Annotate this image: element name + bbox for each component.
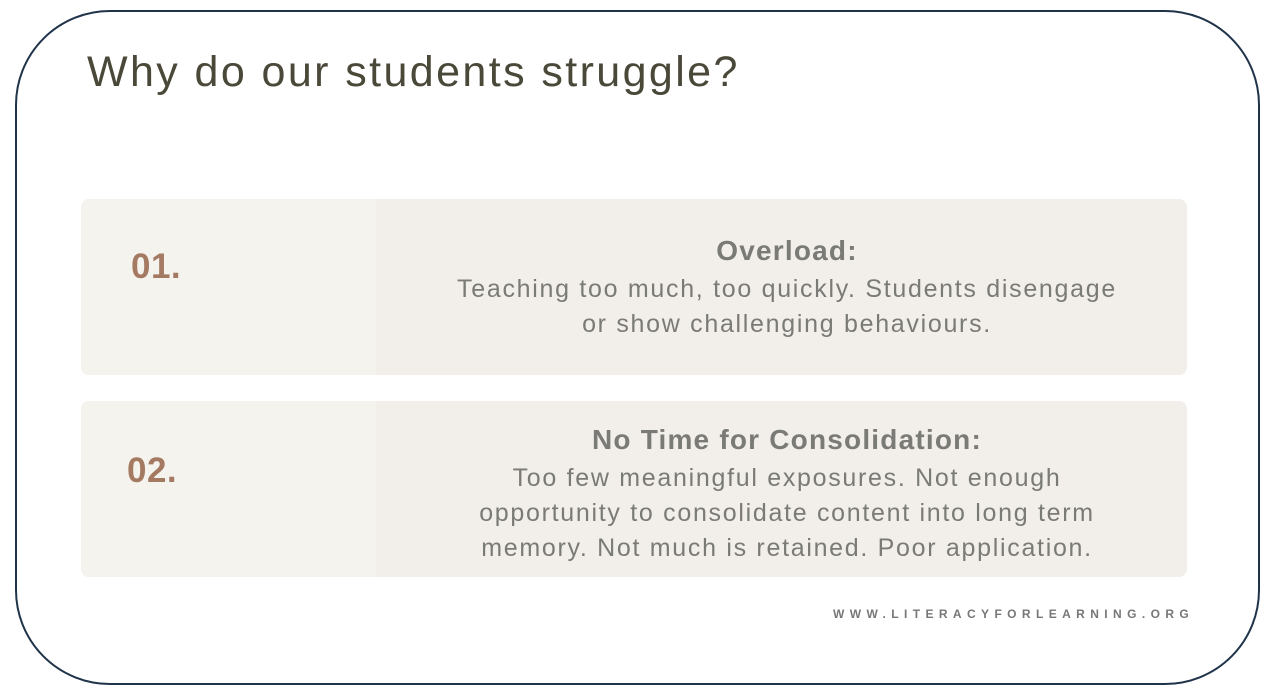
panel: overload [81,199,1187,375]
number 02: 02. [127,451,177,490]
text: consolidation: memory. Not much is retained. Poor application. [481,534,1093,562]
text: overload: Overload: [716,235,858,266]
text: consolidation: No Time for Consolidation: [592,424,982,455]
text: consolidation [479,424,1095,562]
text: overload: or show challenging behaviours. [582,310,992,338]
text: overload [457,235,1117,338]
text: overload: Teaching too much, too quickly. Students disengage [457,275,1117,303]
title: Why do our students struggle? [87,48,740,96]
text: consolidation: opportunity to consolidate content into long term [479,499,1095,527]
number 01: 01. [131,247,181,286]
text: consolidation: Too few meaningful exposures. Not enough [513,464,1061,492]
footer url: WWW.LITERACYFORLEARNING.ORG [833,607,1194,621]
panel: consolidation [81,401,1187,577]
